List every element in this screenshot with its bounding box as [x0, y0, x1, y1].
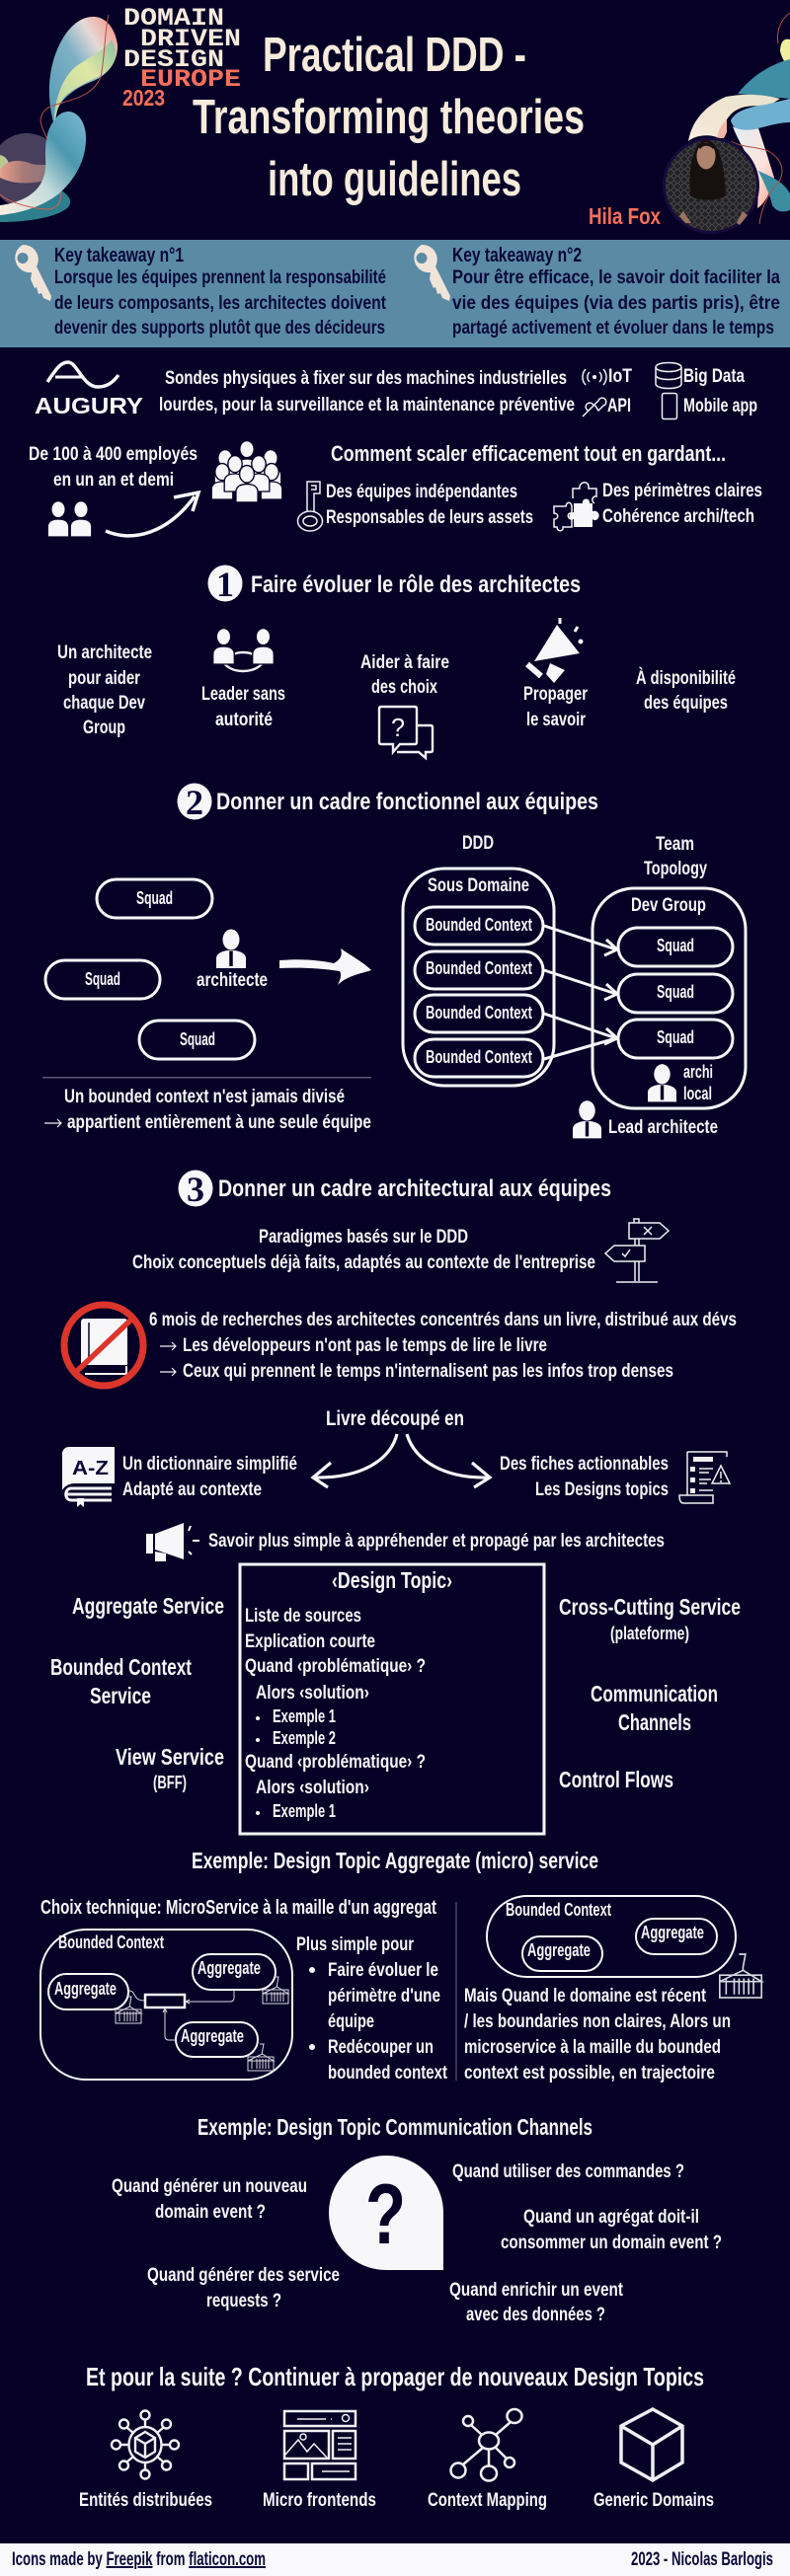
alternative text: microservice à la maille du bounded: [464, 2036, 721, 2058]
icon: micro frontends: [284, 2411, 356, 2479]
company description: [159, 367, 575, 416]
example heading: Exemple: Design Topic Communication Channels: [198, 2114, 592, 2140]
augury logo: [35, 362, 143, 418]
topic: bounded context service: Service: [90, 1683, 151, 1708]
section 3: [50, 1170, 741, 1834]
squad 3: [139, 1021, 255, 1059]
local architect: [648, 1062, 713, 1103]
icon: question chat: [379, 707, 433, 758]
topic: cross-cutting service: [559, 1594, 741, 1643]
aggregate c: [176, 2022, 258, 2057]
topic: communication channels: Channels: [618, 1709, 691, 1735]
lead architect: [573, 1100, 718, 1138]
conference logo: EUROPE: [140, 65, 241, 94]
employees text: [29, 443, 198, 491]
bounded context diagram right: Bounded Context: [506, 1900, 611, 1920]
benefits list: Redécouper un: [328, 2036, 434, 2058]
dev group container: Dev Group: [631, 894, 706, 916]
takeaway 1 text: Key takeaway n°1: [54, 245, 184, 266]
key takeaways band: [0, 240, 790, 347]
bounded context rule: [44, 1086, 371, 1133]
takeaway 2 text: Key takeaway n°2: [452, 245, 582, 266]
design topic template box: Alors ‹solution›: [256, 1777, 369, 1798]
conference logo: 2023: [122, 85, 165, 111]
tech: api: [583, 395, 631, 417]
message broker: [145, 1995, 185, 2008]
role: leader text: autorité: [215, 709, 273, 730]
arrow: split right: [407, 1434, 490, 1487]
topic: aggregate service: Aggregate Service: [72, 1593, 224, 1619]
key icon 2: [414, 245, 450, 301]
paradigms text: Paradigmes basés sur le DDD: [259, 1226, 468, 1248]
design topic template box: Quand ‹problématique› ?: [245, 1751, 426, 1773]
example: aggregate service: [40, 1848, 761, 2084]
book problem text: [149, 1309, 737, 1382]
conference logo: DRIVEN: [140, 25, 241, 53]
aggregate d: Aggregate: [527, 1940, 591, 1960]
design topic template box: Explication courte: [245, 1630, 375, 1652]
icon: small megaphone: [146, 1523, 199, 1561]
role: one architect: Group: [83, 717, 125, 738]
team topology label: Topology: [644, 858, 707, 879]
takeaway 1 text: Lorsque les équipes prennent la responsabilité: [54, 266, 386, 288]
icon: signpost: [605, 1219, 669, 1282]
actionable sheets text: Les Designs topics: [535, 1478, 669, 1500]
next steps: [79, 2362, 714, 2511]
aggregate d: [522, 1936, 602, 1971]
augury logo: AUGURY: [35, 393, 143, 418]
speaker photo: [663, 137, 759, 234]
footer: [0, 2543, 790, 2576]
icon: distributed entities: [112, 2410, 179, 2479]
alternative text: context est possible, en trajectoire: [464, 2062, 715, 2084]
design topic template box: Exemple 2: [273, 1728, 336, 1748]
squad c: [618, 1020, 733, 1058]
label: distributed entities: Entités distribuées: [79, 2489, 212, 2511]
scaling item: key: Des équipes indépendantes: [326, 481, 517, 502]
icon: question bubble: ?: [365, 2167, 406, 2262]
question: enrich event: avec des données ?: [466, 2304, 605, 2325]
takeaway 1 text: [54, 245, 386, 339]
question: aggregate consume: [501, 2206, 722, 2253]
role: leader text: Leader sans: [201, 683, 285, 705]
design topic template box: ‹Design Topic›: [332, 1567, 452, 1593]
scaling item: puzzle: [554, 480, 762, 531]
design topic template box: Exemple 1: [273, 1706, 336, 1726]
bounded context 1: Bounded Context: [426, 915, 532, 935]
squad 1: [97, 879, 212, 918]
company description: lourdes, pour la surveillance et la maintenance préventive: [159, 394, 575, 416]
bounded context diagram: Bounded Context: [58, 1932, 164, 1952]
design topic template box: Quand ‹problématique› ?: [245, 1655, 426, 1677]
tech: iot: [583, 365, 632, 387]
section 2 heading: Donner un cadre fonctionnel aux équipes: [216, 789, 598, 815]
role: spread knowledge: [523, 683, 588, 730]
aggregate e: [636, 1919, 717, 1954]
section 3 heading: 3: [187, 1170, 204, 1209]
tech: iot: IoT: [608, 365, 632, 387]
aggregate b: Aggregate: [198, 1958, 261, 1978]
role: help choices: Aider à faire: [360, 651, 449, 673]
question: domain event: [112, 2175, 307, 2223]
local architect: archi: [683, 1062, 713, 1082]
bounded context 2: Bounded Context: [426, 958, 532, 978]
section 2 heading: 2: [186, 783, 203, 822]
bounded context 2: [415, 951, 543, 989]
icon: question chat: ?: [391, 713, 405, 742]
topic: view service: (BFF): [153, 1773, 187, 1792]
squad b: Squad: [657, 982, 694, 1002]
topic: communication channels: Communication: [591, 1681, 718, 1706]
topic: view service: [116, 1744, 224, 1792]
bounded context rule: Un bounded context n'est jamais divisé: [64, 1086, 345, 1107]
title: Transforming theories: [193, 91, 585, 144]
question: domain event: Quand générer un nouveau: [112, 2175, 307, 2197]
book problem text: Ceux qui prennent le temps n'internalisent pas les infos trop denses: [183, 1360, 673, 1382]
icon: document alert: [679, 1452, 730, 1503]
squad a: Squad: [657, 936, 694, 955]
bounded context diagram right: [487, 1896, 761, 1998]
footer credits: Icons made by Freepik from flaticon.com: [12, 2548, 266, 2570]
architect: architecte: [197, 969, 268, 991]
decorative blob right: [688, 13, 790, 224]
key icon 1: [15, 245, 51, 301]
big arrow: [279, 948, 371, 985]
benefits list: équipe: [328, 2010, 374, 2032]
role: spread knowledge: le savoir: [526, 709, 586, 730]
benefits list: [296, 1933, 447, 2084]
tech: big data: [656, 363, 745, 389]
growth panel: [29, 441, 762, 537]
arrow: growth: [106, 492, 198, 536]
architect: [197, 930, 268, 991]
bounded context 4: [415, 1039, 543, 1077]
role: one architect: [57, 642, 152, 738]
icon: crowd: [211, 441, 282, 502]
team topology label: [644, 833, 707, 879]
question: aggregate consume: consommer un domain event ?: [501, 2232, 722, 2253]
tech: api: API: [607, 395, 631, 417]
benefits list: Plus simple pour: [296, 1933, 414, 1955]
ddd column label: DDD: [462, 832, 494, 854]
squad a: [618, 928, 733, 966]
icon: generic domains cube: [621, 2409, 682, 2480]
squad 2: [45, 960, 160, 999]
title: into guidelines: [268, 153, 521, 206]
benefits list: périmètre d'une: [328, 1985, 440, 2007]
bounded context 4: Bounded Context: [426, 1047, 532, 1067]
label: micro frontends: Micro frontends: [263, 2489, 376, 2511]
employees text: De 100 à 400 employés: [29, 443, 198, 465]
squad 2: Squad: [85, 969, 120, 989]
label: generic domains: Generic Domains: [593, 2489, 714, 2511]
icon: question bubble: [329, 2156, 443, 2270]
design topic template box: [240, 1564, 544, 1834]
sous domaine container: Sous Domaine: [428, 874, 529, 896]
role: one architect: pour aider: [68, 667, 140, 689]
scaling item: key: [298, 481, 533, 531]
icon: two people: [47, 501, 92, 537]
icon: no book: [64, 1305, 143, 1386]
company context panel: [35, 362, 757, 418]
role: one architect: chaque Dev: [63, 692, 145, 714]
actionable sheets text: [500, 1453, 669, 1500]
bounded context diagram: [40, 1930, 292, 2080]
speaker name: Hila Fox: [589, 203, 661, 229]
label: context mapping: Context Mapping: [428, 2489, 547, 2511]
takeaway 1 text: de leurs composants, les architectes doivent: [54, 292, 386, 314]
topic: view service: View Service: [116, 1744, 224, 1770]
section 2: [42, 783, 746, 1138]
conference logo: DOMAIN: [123, 4, 224, 33]
dev group container: [592, 888, 746, 1108]
icon: context mapping: [450, 2409, 521, 2481]
aggregate b: [193, 1954, 276, 1990]
team topology label: Team: [656, 833, 694, 855]
container icon: [720, 1954, 761, 1998]
aggregate c: Aggregate: [181, 2026, 244, 2046]
aggregate e: Aggregate: [641, 1923, 704, 1942]
paradigms text: [132, 1226, 595, 1273]
question: service requests: [147, 2264, 340, 2311]
header panel: [0, 4, 790, 234]
question: enrich event: Quand enrichir un event: [449, 2279, 623, 2301]
design topic template box: Exemple 1: [273, 1801, 336, 1821]
example: communication channels: [112, 2114, 722, 2325]
question: aggregate consume: Quand un agrégat doit-il: [523, 2206, 699, 2228]
role: availability: À disponibilité: [636, 666, 736, 689]
question: commands: Quand utiliser des commandes ?: [452, 2160, 684, 2182]
dictionary text: Adapté au contexte: [122, 1478, 262, 1500]
squad b: [618, 974, 733, 1013]
bounded context 3: [415, 995, 543, 1032]
topic: cross-cutting service: (plateforme): [610, 1624, 689, 1643]
icon: leader: [213, 629, 274, 671]
section 3 heading: [178, 1170, 611, 1209]
question: domain event: domain event ?: [155, 2201, 266, 2223]
bounded context rule: appartient entièrement à une seule équipe: [67, 1111, 371, 1133]
role: one architect: Un architecte: [57, 642, 152, 663]
question: enrich event: [449, 2279, 623, 2325]
alternative text: Mais Quand le domaine est récent: [464, 1985, 706, 2007]
benefits list: bounded context: [328, 2062, 447, 2084]
sous domaine container: [403, 869, 554, 1086]
book problem text: Les développeurs n'ont pas le temps de lire le livre: [183, 1334, 547, 1356]
paradigms text: Choix conceptuels déjà faits, adaptés au contexte de l'entreprise: [132, 1251, 595, 1273]
section 1 heading: Faire évoluer le rôle des architectes: [251, 571, 581, 598]
dictionary text: [122, 1453, 297, 1500]
squad 3: Squad: [180, 1029, 215, 1049]
topic: control flows: Control Flows: [559, 1767, 673, 1792]
actionable sheets text: Des fiches actionnables: [500, 1453, 669, 1475]
section 1 heading: 1: [216, 565, 234, 604]
question: service requests: Quand générer des service: [147, 2264, 340, 2286]
bounded context 3: Bounded Context: [426, 1003, 532, 1023]
icon: dictionary: A-Z: [72, 1458, 109, 1479]
company description: Sondes physiques à fixer sur des machines industrielles: [165, 367, 567, 389]
aggregate a: Aggregate: [54, 1979, 117, 1999]
alternative text: [464, 1985, 731, 2084]
title: Practical DDD -: [263, 29, 526, 82]
benefits list: Faire évoluer le: [328, 1959, 438, 1981]
example heading: Exemple: Design Topic Aggregate (micro) service: [192, 1848, 598, 1873]
arrow: split left: [313, 1434, 397, 1487]
question: service requests: requests ?: [206, 2290, 281, 2311]
role: spread knowledge: Propager: [523, 683, 588, 705]
topic: bounded context service: [50, 1654, 192, 1708]
technical choice text: Choix technique: MicroService à la maille d'un aggregat: [40, 1897, 436, 1919]
topic: bounded context service: Bounded Context: [50, 1654, 192, 1680]
tech: big data: Big Data: [683, 365, 745, 387]
design topic template box: Liste de sources: [245, 1605, 361, 1627]
decorative blob left: [0, 15, 118, 222]
scaling item: key: Responsables de leurs assets: [326, 506, 533, 528]
tech: mobile app: Mobile app: [683, 395, 757, 417]
topic: communication channels: [591, 1681, 718, 1735]
title: [193, 29, 585, 206]
lead architect: Lead architecte: [608, 1116, 718, 1138]
section 1: [57, 565, 736, 758]
squad c: Squad: [657, 1027, 694, 1047]
employees text: en un an et demi: [53, 469, 174, 491]
role: help choices: [360, 651, 449, 698]
role: availability: des équipes: [644, 692, 728, 714]
mapping arrows: [544, 926, 617, 1059]
squad 1: Squad: [136, 888, 173, 908]
dictionary text: Un dictionnaire simplifié: [122, 1453, 297, 1475]
knowledge statement: Savoir plus simple à appréhender et propagé par les architectes: [208, 1530, 665, 1552]
aggregate a: [48, 1974, 128, 2009]
section 2 heading: [178, 783, 598, 822]
icon: dictionary: [62, 1447, 115, 1507]
design topic template box: Alors ‹solution›: [256, 1682, 369, 1704]
icon: megaphone: [527, 618, 583, 683]
split heading: Livre découpé en: [326, 1407, 464, 1430]
conference logo: [122, 4, 241, 111]
container icons: [116, 1977, 288, 2071]
bounded context 1: [415, 907, 543, 945]
section 3 heading: Donner un cadre architectural aux équipes: [218, 1175, 611, 1202]
conference logo: DESIGN: [123, 45, 224, 74]
role: leader text: [201, 683, 285, 730]
role: availability: [636, 666, 736, 714]
tech: mobile app: [662, 393, 757, 418]
role: help choices: des choix: [371, 676, 437, 698]
section 1 heading: [207, 565, 581, 604]
local architect: local: [683, 1084, 712, 1103]
takeaway 2 text: [452, 245, 780, 339]
takeaway 1 text: devenir des supports plutôt que des décideurs: [54, 317, 385, 339]
